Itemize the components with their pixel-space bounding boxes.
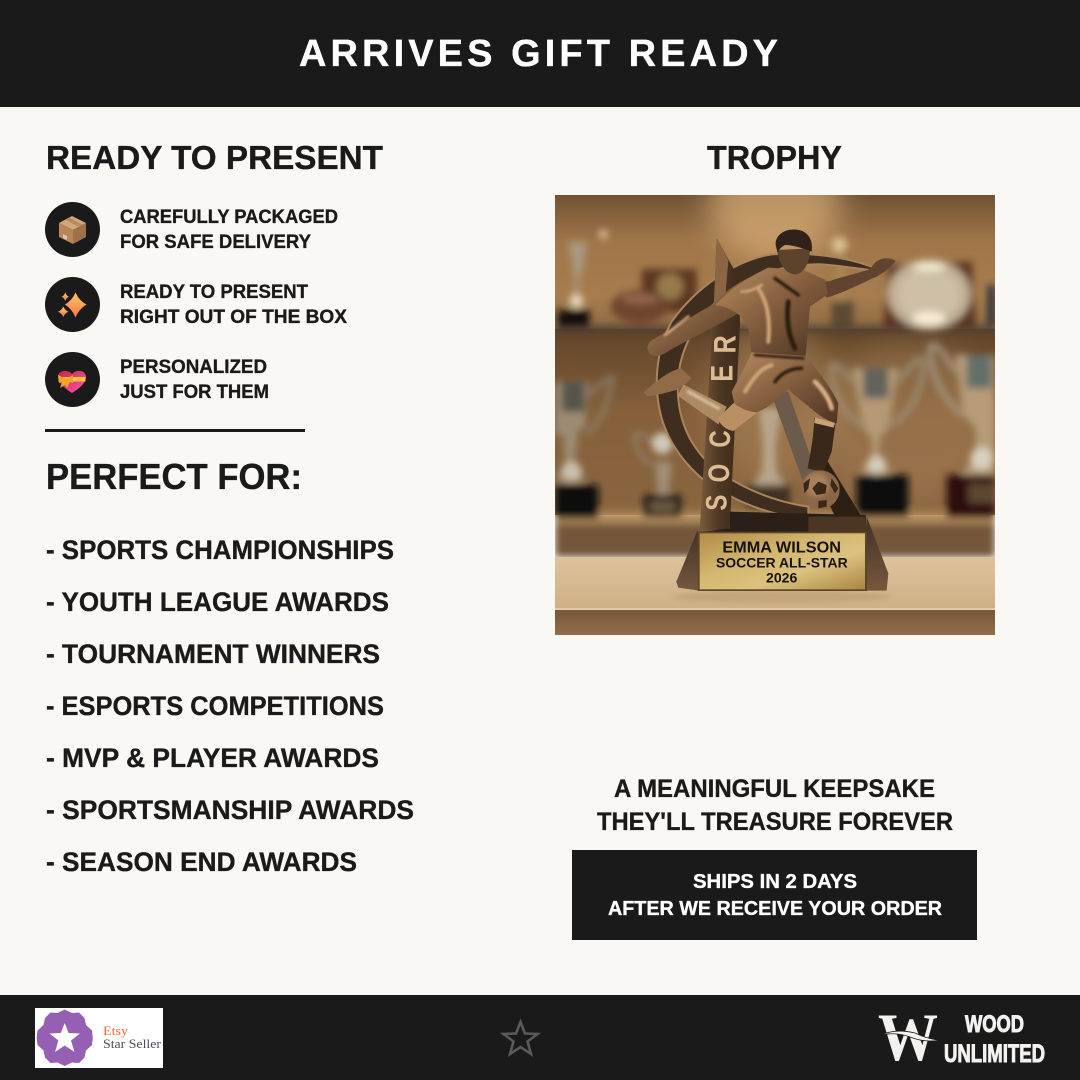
- callout: keepsake message: THEY'LL TREASURE FOREVER: [597, 808, 953, 836]
- player: limbs: [648, 277, 752, 356]
- lower shelf: [555, 485, 598, 518]
- feature: ready to present: [45, 277, 347, 332]
- trophy figure: [644, 229, 896, 591]
- ring swoosh: [657, 254, 872, 520]
- logo: wood unlimited: UNLIMITED: [944, 1040, 1045, 1068]
- text: ready to present: READY TO PRESENT: [120, 281, 308, 303]
- callout: keepsake message: [597, 775, 953, 836]
- text: carefully packaged: [120, 206, 338, 253]
- badge: etsy star seller: Star Seller: [103, 1036, 162, 1051]
- icon: package box: [59, 216, 86, 244]
- heading: perfect for: PERFECT FOR:: [46, 456, 302, 497]
- letters on bar: [699, 335, 743, 511]
- letters on bar: O: [701, 464, 736, 482]
- upright bar: [700, 238, 740, 530]
- feature: carefully packaged: [45, 202, 338, 257]
- icon: outline star: [504, 1022, 538, 1054]
- text: personalized: JUST FOR THEM: [120, 381, 269, 403]
- base: [698, 512, 867, 532]
- panel: ready to present: [45, 139, 383, 407]
- icon: sparkles: [58, 292, 86, 318]
- heading: trophy: TROPHY: [707, 139, 842, 176]
- list: occasions: - TOURNAMENT WINNERS: [46, 639, 380, 669]
- letters on bar: E: [705, 365, 740, 382]
- logo: wood unlimited: WOOD: [965, 1011, 1024, 1038]
- list: occasions: [46, 535, 414, 877]
- plaque: [698, 532, 867, 591]
- callout: shipping box: [572, 850, 977, 940]
- player: head: [778, 248, 810, 274]
- photo: soccer trophy on shelf: [555, 148, 998, 635]
- list: occasions: - ESPORTS COMPETITIONS: [46, 691, 384, 721]
- feature: personalized: [45, 352, 269, 407]
- callout: shipping box: SHIPS IN 2 DAYS: [693, 871, 857, 893]
- list: occasions: - YOUTH LEAGUE AWARDS: [46, 587, 389, 617]
- divider: [45, 429, 305, 432]
- panel: perfect for: [46, 456, 414, 877]
- letters on bar: S: [699, 495, 733, 511]
- player: torso and shorts: [715, 268, 828, 356]
- player: highlights: [665, 278, 832, 408]
- callout: shipping box: AFTER WE RECEIVE YOUR ORDER: [608, 898, 943, 920]
- text: ready to present: [120, 281, 347, 328]
- text: carefully packaged: FOR SAFE DELIVERY: [120, 231, 311, 253]
- letters on bar: R: [708, 335, 743, 353]
- list: occasions: - SEASON END AWARDS: [46, 847, 357, 877]
- list: occasions: - SPORTSMANSHIP AWARDS: [46, 795, 414, 825]
- list: occasions: - SPORTS CHAMPIONSHIPS: [46, 535, 394, 565]
- text: carefully packaged: CAREFULLY PACKAGED: [120, 206, 338, 228]
- footer bar: [0, 995, 1080, 1080]
- header banner: [0, 0, 1080, 107]
- text: ready to present: RIGHT OUT OF THE BOX: [120, 306, 347, 328]
- letters on bar: C: [702, 430, 737, 448]
- plaque: 2026: [766, 570, 798, 586]
- plaque: SOCCER ALL-STAR: [716, 555, 848, 571]
- badge: etsy star seller: [35, 1008, 163, 1068]
- badge: etsy star seller: Etsy: [103, 1023, 129, 1038]
- logo: wood unlimited: W: [878, 999, 938, 1075]
- list: occasions: - MVP & PLAYER AWARDS: [46, 743, 379, 773]
- heading: ready to present: READY TO PRESENT: [46, 139, 383, 176]
- callout: keepsake message: A MEANINGFUL KEEPSAKE: [614, 775, 935, 803]
- logo: wood unlimited: [878, 999, 1045, 1075]
- title: ARRIVES GIFT READY: [299, 33, 778, 75]
- background shelf items: [555, 230, 995, 557]
- table: [555, 557, 995, 610]
- diagonal bar: [772, 392, 816, 482]
- plaque: EMMA WILSON: [722, 539, 841, 556]
- top shelf: [558, 310, 589, 327]
- soccer ball: [801, 470, 840, 509]
- icon: heart with ribbon: [58, 371, 86, 393]
- text: personalized: [120, 356, 269, 403]
- text: personalized: PERSONALIZED: [120, 356, 267, 378]
